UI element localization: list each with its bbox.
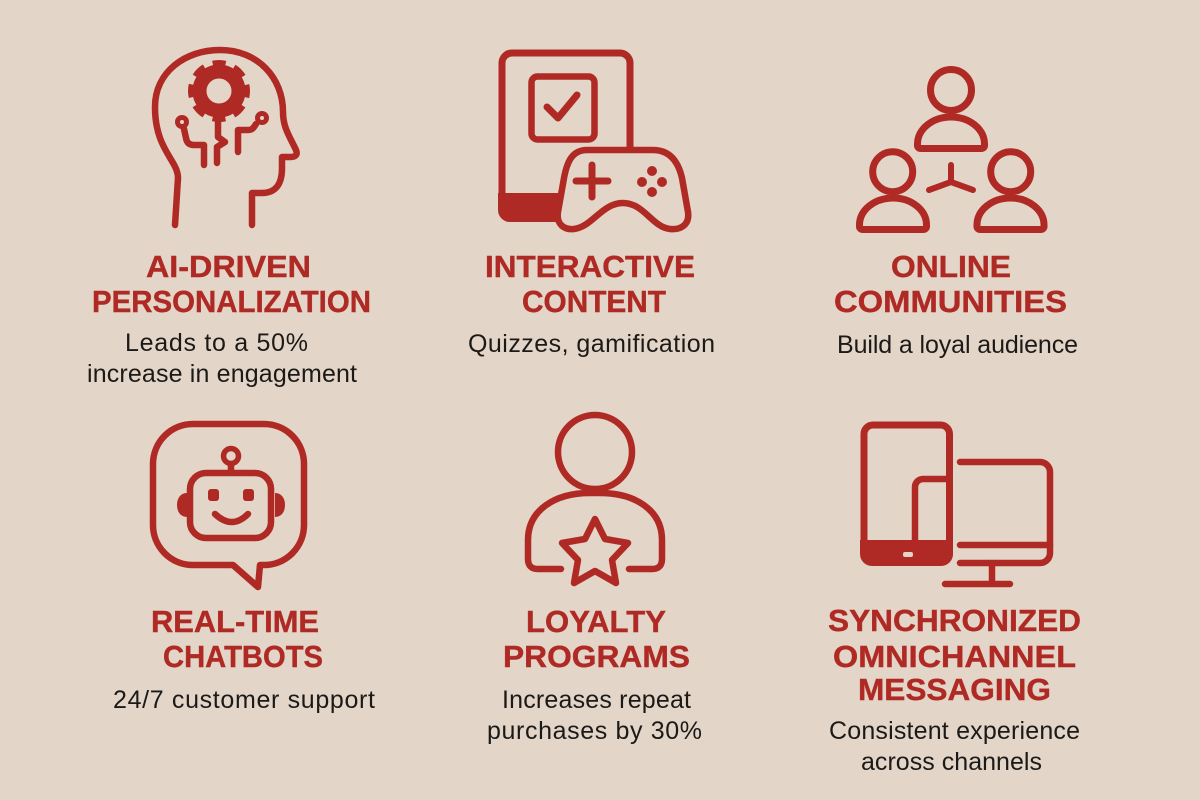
icon: robot in speech bubble [153, 424, 304, 587]
heading: ONLINE [891, 249, 1011, 284]
panel: AI-driven personalization [87, 50, 371, 388]
heading [834, 249, 1067, 319]
heading: AI-DRIVEN [146, 249, 311, 284]
heading: INTERACTIVE [485, 249, 695, 284]
icon: tablet quiz and game controller [498, 53, 688, 229]
panel: synchronized omnichannel messaging [828, 425, 1081, 776]
description [87, 329, 357, 388]
panel: online communities [834, 70, 1078, 359]
description: Quizzes, gamification [468, 330, 715, 358]
description [487, 686, 702, 745]
heading: PERSONALIZATION [92, 284, 371, 319]
description: increase in engagement [87, 360, 357, 388]
panel: interactive content [468, 53, 715, 358]
heading: CHATBOTS [163, 639, 323, 674]
description: Leads to a 50% [125, 329, 308, 357]
description: across channels [861, 748, 1042, 776]
heading: LOYALTY [526, 604, 666, 639]
heading [828, 603, 1081, 707]
description: 24/7 customer support [113, 686, 375, 714]
description: purchases by 30% [487, 717, 702, 745]
description: Increases repeat [502, 686, 691, 714]
heading: SYNCHRONIZED [828, 603, 1081, 638]
heading: COMMUNITIES [834, 284, 1067, 319]
heading [151, 604, 323, 674]
heading [92, 249, 371, 319]
icon: head with gear and circuits [155, 50, 297, 225]
icon: three connected people [859, 70, 1044, 230]
icon: person with star [528, 415, 662, 583]
panel: real-time chatbots [113, 424, 375, 714]
heading [485, 249, 695, 319]
heading: OMNICHANNEL [833, 639, 1076, 674]
description: Consistent experience [829, 717, 1080, 745]
heading: REAL-TIME [151, 604, 319, 639]
heading: CONTENT [522, 284, 666, 319]
heading: MESSAGING [858, 672, 1051, 707]
description: Build a loyal audience [837, 331, 1078, 359]
icon: tablet, phone and monitor [860, 425, 1050, 584]
description [829, 717, 1080, 776]
heading: PROGRAMS [503, 639, 690, 674]
heading [503, 604, 690, 674]
panel: loyalty programs [487, 415, 702, 745]
